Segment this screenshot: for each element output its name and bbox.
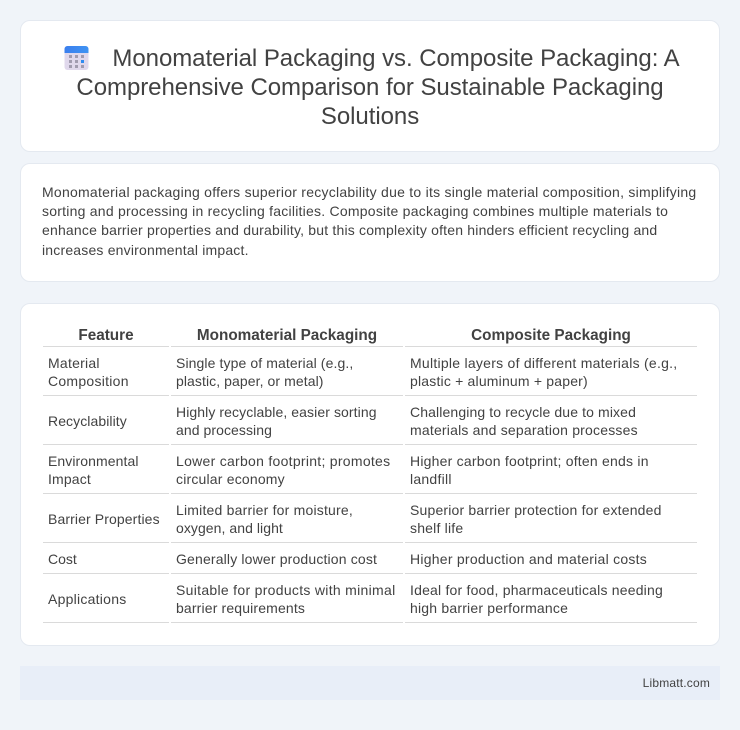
title: Comprehensive Comparison for Sustainable Packaging	[76, 74, 664, 101]
comparison table: Monomaterial Packaging	[197, 327, 377, 344]
comparison table: landfill	[410, 471, 452, 487]
comparison table: Recyclability	[48, 413, 127, 429]
comparison table: Higher carbon footprint; often ends in	[410, 453, 649, 469]
text: description: enhance barrier properties and durability, but this complexity often hinders efficient recycling and	[42, 222, 657, 238]
comparison table: Ideal for food, pharmaceuticals needing	[410, 582, 663, 598]
text: description: Monomaterial packaging offers superior recyclability due to its single material composition, simplifying	[42, 184, 696, 200]
comparison table	[43, 327, 697, 623]
title	[76, 45, 680, 130]
comparison table: shelf life	[410, 520, 463, 536]
comparison table: Feature	[78, 327, 134, 344]
comparison table: Limited barrier for moisture,	[176, 502, 353, 518]
footer text: Libmatt.com	[643, 676, 710, 690]
comparison table: circular economy	[176, 471, 285, 487]
title: Solutions	[321, 103, 419, 130]
text: description: increases environmental impact.	[42, 242, 249, 258]
comparison table: Multiple layers of different materials (e.g.,	[410, 355, 677, 371]
comparison table: and processing	[176, 422, 272, 438]
comparison table: Generally lower production cost	[176, 551, 377, 567]
comparison table: Superior barrier protection for extended	[410, 502, 662, 518]
comparison table: Single type of material (e.g.,	[176, 355, 353, 371]
comparison table: Challenging to recycle due to mixed	[410, 404, 636, 420]
comparison table: materials and separation processes	[410, 422, 638, 438]
panel: description card	[20, 163, 720, 282]
text: description	[42, 184, 696, 258]
comparison table: high barrier performance	[410, 600, 568, 616]
comparison table: Highly recyclable, easier sorting	[176, 404, 377, 420]
comparison table: Applications	[48, 591, 126, 607]
comparison table: Material	[48, 355, 100, 371]
footer bar	[20, 666, 720, 700]
text: description: sorting and processing in recycling facilities. Composite packaging combines multiple materials to	[42, 203, 668, 219]
comparison table: Barrier Properties	[48, 511, 160, 527]
comparison table: Composite Packaging	[471, 327, 631, 344]
comparison table: Higher production and material costs	[410, 551, 647, 567]
comparison table: oxygen, and light	[176, 520, 283, 536]
comparison table: plastic, paper, or metal)	[176, 373, 324, 389]
comparison table: Impact	[48, 471, 91, 487]
comparison table: Lower carbon footprint; promotes	[176, 453, 390, 469]
title: Monomaterial Packaging vs. Composite Packaging: A	[112, 45, 680, 72]
comparison table: Environmental	[48, 453, 139, 469]
icon: calendar	[64, 46, 88, 70]
comparison table: Composition	[48, 373, 129, 389]
comparison table: plastic + aluminum + paper)	[410, 373, 588, 389]
comparison table: barrier requirements	[176, 600, 305, 616]
comparison table: Cost	[48, 551, 77, 567]
panel: comparison table card	[20, 303, 720, 646]
comparison table: Suitable for products with minimal	[176, 582, 396, 598]
panel: title card	[20, 20, 720, 152]
